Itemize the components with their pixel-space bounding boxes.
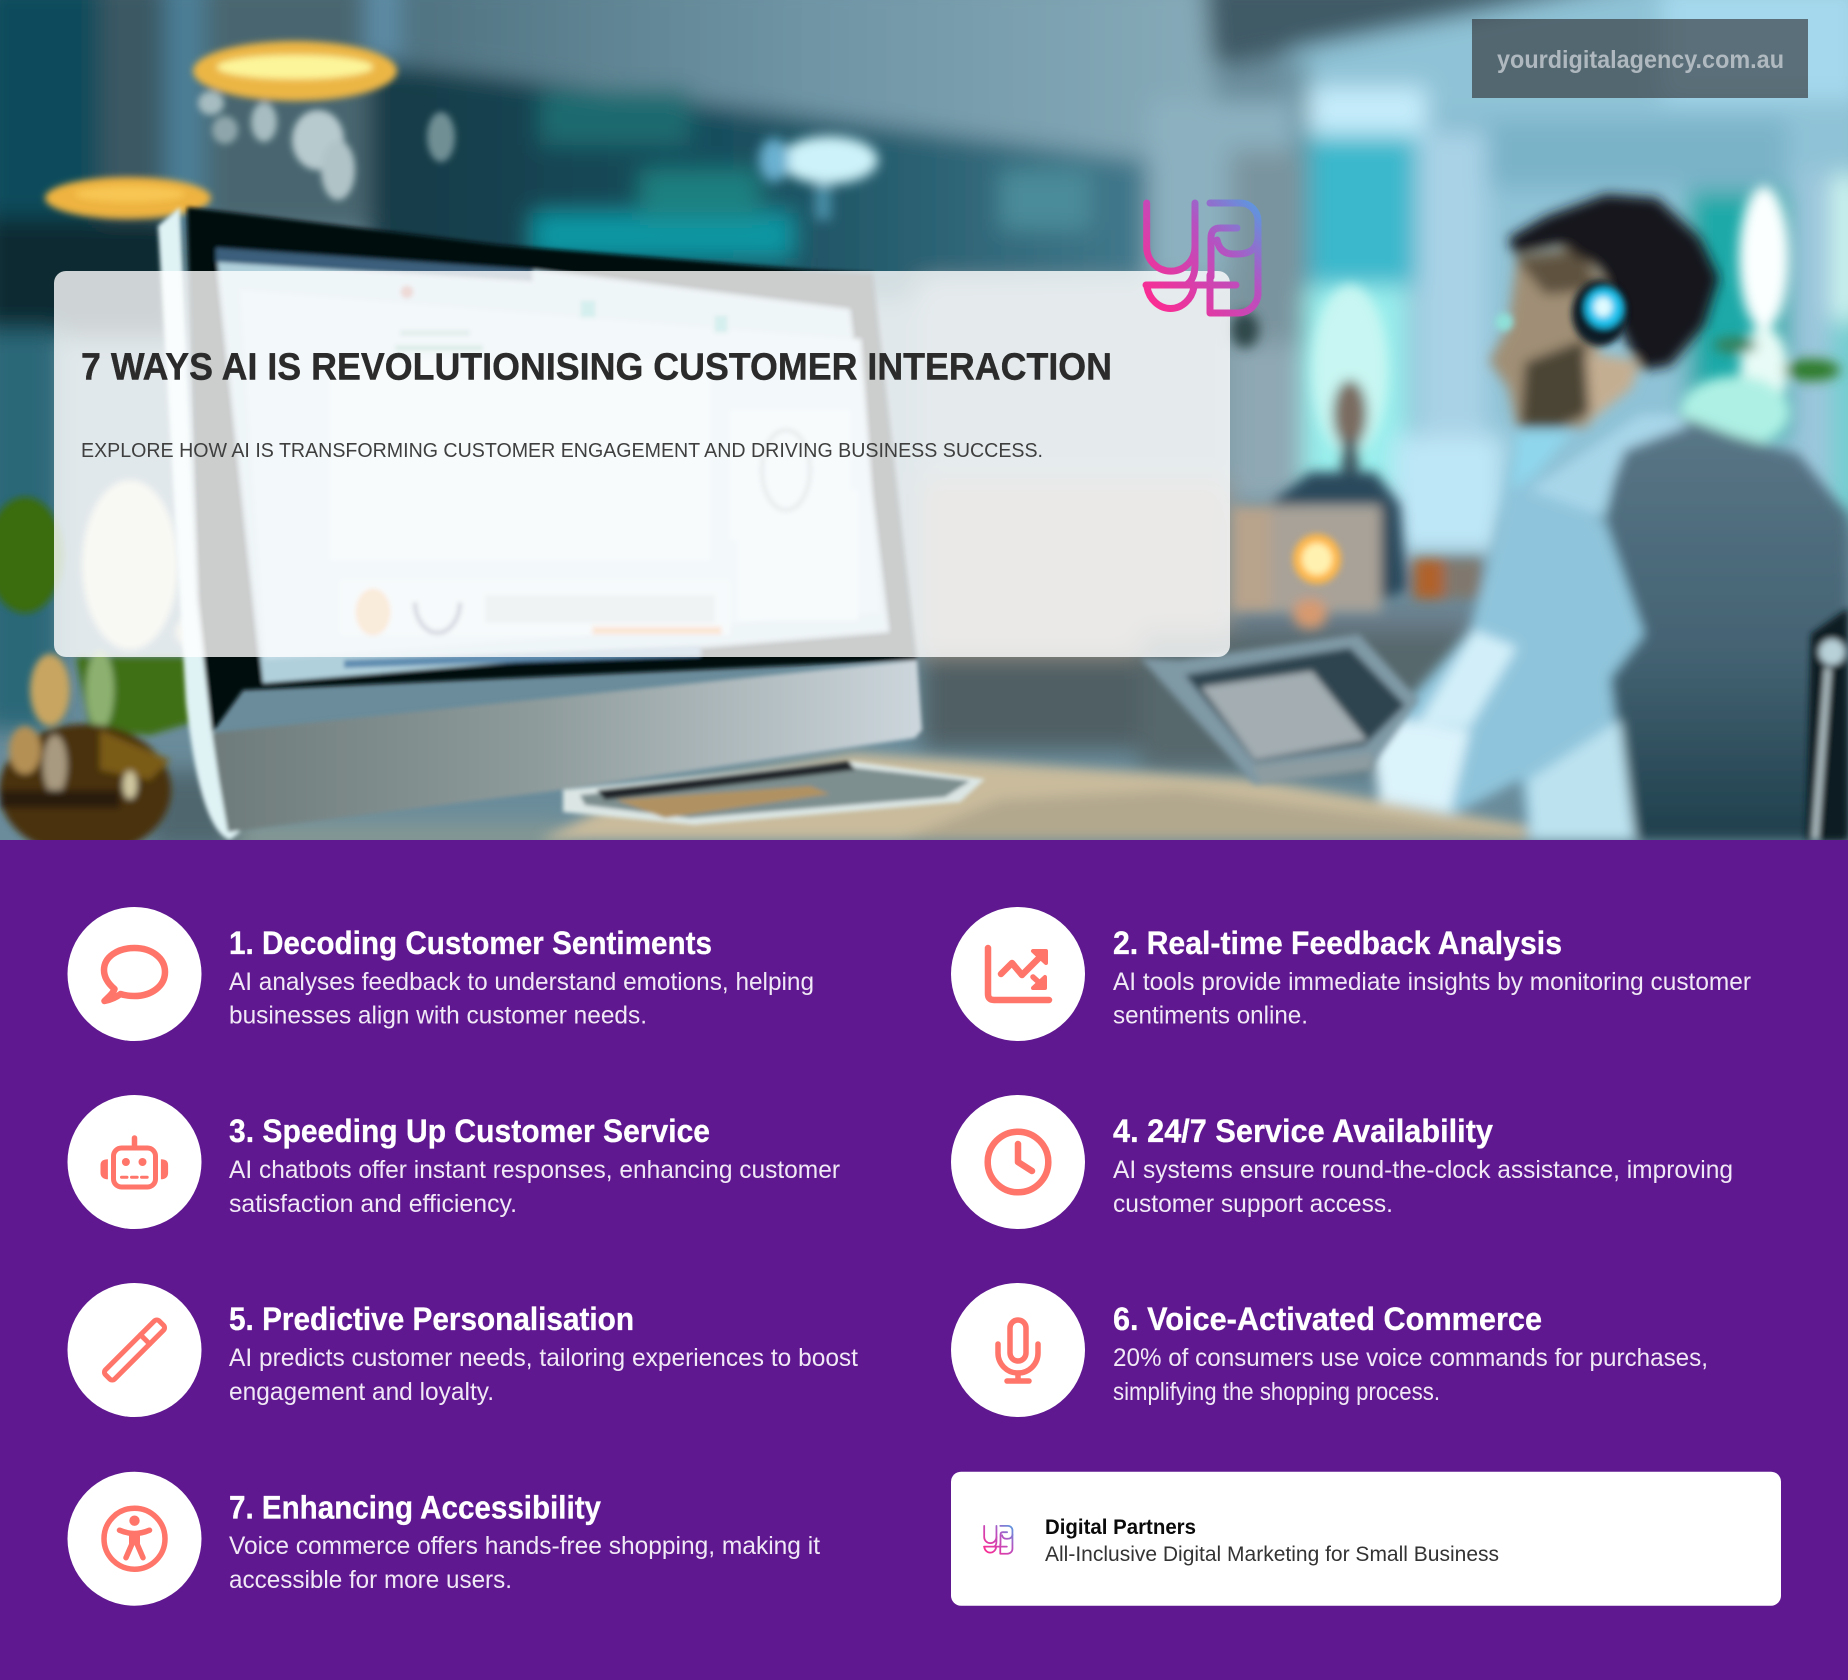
item 5: predictive personalisation — [68, 1283, 858, 1417]
blurred background highlights — [540, 136, 1848, 840]
office chair — [1806, 608, 1848, 840]
item 2: real-time feedback analysis — [951, 907, 1751, 1041]
description: AI systems ensure round-the-clock assistance, improving — [1113, 1156, 1733, 1184]
icon: trend chart — [988, 948, 1049, 1000]
heading: 1. Decoding Customer Sentiments — [229, 925, 712, 961]
website badge — [1472, 19, 1808, 98]
screen dashboard details — [216, 248, 880, 660]
partner name: Digital Partners — [1045, 1516, 1196, 1539]
hero photo: office worker at a monitor — [0, 0, 1848, 856]
small logo — [984, 1526, 1012, 1554]
description — [229, 968, 814, 1030]
description: 20% of consumers use voice commands for purchases, — [1113, 1344, 1708, 1372]
blurred office background — [0, 0, 1848, 850]
partner card — [951, 1472, 1781, 1606]
description: engagement and loyalty. — [229, 1378, 494, 1406]
description: businesses align with customer needs. — [229, 1002, 647, 1030]
item 4: 24/7 service availability — [951, 1095, 1733, 1229]
computer monitor — [158, 207, 985, 840]
purple content background — [0, 840, 1848, 1680]
item 3: speeding up customer service — [68, 1095, 840, 1229]
hero text panel — [54, 271, 1230, 657]
icon: clock — [988, 1132, 1048, 1192]
man's shirt — [1372, 414, 1848, 840]
icon: microphone — [998, 1320, 1038, 1381]
description: Voice commerce offers hands-free shopping, making it — [229, 1532, 820, 1560]
tablet on desk — [1140, 634, 1419, 785]
description — [229, 1532, 820, 1594]
pendant lamps and glass beads — [0, 41, 1848, 856]
subtitle: EXPLORE HOW AI IS TRANSFORMING CUSTOMER ENGAGEMENT AND DRIVING BUSINESS SUCCESS. — [81, 440, 1043, 462]
title: 7 WAYS AI IS REVOLUTIONISING CUSTOMER INTERACTION — [81, 346, 1112, 388]
heading: 2. Real-time Feedback Analysis — [1113, 925, 1562, 961]
description: AI analyses feedback to understand emotions, helping — [229, 968, 814, 996]
heading: 7. Enhancing Accessibility — [229, 1490, 601, 1526]
description — [1113, 1344, 1708, 1406]
description: AI tools provide immediate insights by monitoring customer — [1113, 968, 1751, 996]
description — [1113, 968, 1751, 1030]
description: AI predicts customer needs, tailoring experiences to boost — [229, 1344, 858, 1372]
icon: accessibility figure — [104, 1508, 165, 1569]
icon: pen — [103, 1319, 166, 1381]
headphones — [1495, 280, 1628, 346]
orange glow on laptop — [1293, 534, 1341, 584]
description: simplifying the shopping process. — [1113, 1378, 1440, 1406]
icon: speech bubble — [104, 948, 165, 1001]
description: satisfaction and efficiency. — [229, 1190, 517, 1218]
item 1: decoding customer sentiments — [68, 907, 814, 1041]
monitor base with tan pad — [563, 761, 985, 825]
icon: robot — [100, 1138, 168, 1187]
heading: 3. Speeding Up Customer Service — [229, 1113, 710, 1149]
heading: 6. Voice-Activated Commerce — [1113, 1301, 1542, 1337]
description — [1113, 1156, 1733, 1218]
description — [229, 1344, 858, 1406]
item 6: voice-activated commerce — [951, 1283, 1708, 1417]
plant — [0, 479, 191, 840]
description — [229, 1156, 840, 1218]
description: sentiments online. — [1113, 1002, 1308, 1030]
website address: yourdigitalagency.com.au — [1497, 46, 1784, 74]
desk surface — [540, 753, 1610, 840]
description: customer support access. — [1113, 1190, 1393, 1218]
item 7: enhancing accessibility — [68, 1472, 820, 1606]
partner tagline: All-Inclusive Digital Marketing for Small Business — [1045, 1543, 1499, 1566]
description: AI chatbots offer instant responses, enhancing customer — [229, 1156, 840, 1184]
logo: YDP monogram — [1146, 203, 1258, 313]
heading: 5. Predictive Personalisation — [229, 1301, 634, 1337]
man's face and hair — [1489, 194, 1719, 427]
heading: 4. 24/7 Service Availability — [1113, 1113, 1493, 1149]
description: accessible for more users. — [229, 1566, 512, 1594]
